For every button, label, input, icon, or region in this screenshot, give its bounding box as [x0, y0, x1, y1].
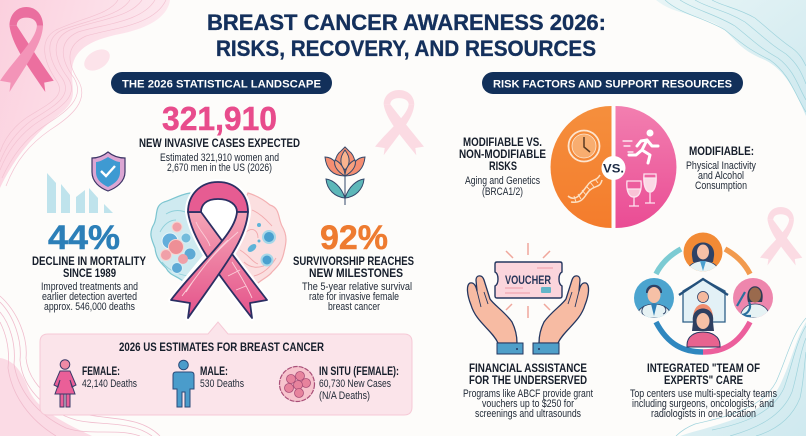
stat: mortality decline: Improved treatments and: [41, 281, 138, 293]
text: modifiable risks: and Alcohol: [698, 170, 744, 182]
icon: pink ribbon top left: [0, 7, 54, 92]
stat: survivorship: rate for invasive female: [309, 291, 399, 303]
stat: mortality decline: SINCE 1989: [63, 267, 116, 280]
icon: runner: [623, 130, 658, 163]
heading pill: statistical landscape: THE 2026 STATISTICAL LANDSCAPE: [122, 78, 321, 90]
ring segments: [656, 249, 750, 352]
text: modifiable risks: MODIFIABLE:: [689, 145, 754, 158]
icon: clock: [568, 130, 600, 162]
text: in situ: [319, 365, 399, 402]
right cell blob: [226, 193, 286, 290]
stat: mortality decline: [32, 219, 146, 313]
text: non-modifiable risks: RISKS: [489, 160, 517, 173]
burst rays: [506, 243, 550, 318]
house: [679, 279, 728, 322]
icon: female figure: [54, 360, 76, 407]
stat: new invasive cases: NEW INVASIVE CASES EXPECTED: [139, 137, 300, 150]
left cell blob: [151, 193, 216, 290]
title: RISKS, RECOVERY, AND RESOURCES: [216, 36, 596, 61]
icon: shield: [92, 152, 125, 191]
text: team of experts: Top centers use multi-specialty teams: [630, 388, 777, 400]
text: non-modifiable risks: Aging and Genetics: [465, 175, 540, 187]
central illustration: ribbon with cells: [151, 182, 286, 318]
doctor left: [634, 278, 674, 318]
stat: mortality decline: approx. 546,000 deaths: [44, 301, 135, 313]
decorative background: pink wave top left: [0, 0, 170, 188]
text: male deaths: [200, 365, 244, 390]
text: in situ: IN SITU (FEMALE):: [319, 365, 399, 378]
stat: survivorship: NEW MILESTONES: [309, 267, 403, 280]
text: in situ: (N/A Deaths): [319, 390, 370, 402]
text: modifiable risks: [686, 145, 757, 192]
text: financial assistance: screenings and ultrasounds: [475, 408, 581, 420]
patient: [687, 308, 720, 347]
heading pill: risk factors: RISK FACTORS AND SUPPORT RESOURCES: [493, 78, 732, 90]
text: financial assistance: [463, 362, 593, 420]
icon: flower: [325, 147, 365, 205]
text: non-modifiable risks: (BRCA1/2): [482, 186, 523, 198]
text: financial assistance: vouchers up to $250 for: [482, 398, 574, 410]
icon: male figure: [173, 360, 194, 407]
panel: 2026 US estimates: [40, 322, 412, 415]
icon: pale ribbon bottom right: [760, 207, 802, 265]
decorative background: teal wave bottom right: [676, 318, 806, 436]
stat: survivorship: The 5-year relative survival: [302, 281, 412, 293]
icon: in situ cell cluster: [280, 366, 314, 402]
left hand: [467, 276, 523, 354]
title: [207, 10, 606, 61]
icon: pale ribbon mid page: [375, 90, 424, 155]
heading pill: statistical landscape: [111, 72, 332, 94]
icon: team of experts ring: [634, 232, 773, 352]
stat: mortality decline: DECLINE IN MORTALITY: [32, 255, 146, 268]
text: non-modifiable risks: MODIFIABLE VS.: [463, 136, 542, 149]
text: modifiable risks: Physical Inactivity: [686, 160, 757, 172]
text: non-modifiable risks: [459, 136, 546, 198]
badge: VS: VS.: [603, 162, 624, 176]
text: male deaths: 530 Deaths: [200, 378, 244, 390]
stat: new invasive cases: Estimated 321,910 women and: [160, 152, 279, 164]
right hand: [533, 276, 589, 354]
icon: wine glasses: [627, 174, 656, 206]
text: financial assistance: FINANCIAL ASSISTANCE: [469, 362, 587, 375]
stat: survivorship: breast cancer: [328, 301, 380, 313]
ribbon: [171, 182, 267, 318]
doctor right with microscope: [733, 278, 773, 318]
text: financial assistance: FOR THE UNDERSERVED: [469, 374, 587, 387]
decorative background: blue wave top right: [656, 0, 806, 116]
text: male deaths: MALE:: [200, 365, 228, 378]
stat: survivorship: SURVIVORSHIP REACHES: [293, 255, 414, 268]
stat: new invasive cases: 321,910: [162, 100, 277, 137]
icon: declining bar chart: [47, 173, 113, 213]
stat: survivorship: 92%: [320, 219, 388, 257]
voucher ticket: VOUCHER: [505, 275, 552, 287]
text: female deaths: 42,140 Deaths: [82, 378, 137, 390]
stat: mortality decline: 44%: [48, 219, 120, 257]
text: team of experts: [630, 362, 777, 420]
decorative background: pink wave bottom left: [0, 296, 160, 436]
heading pill: risk factors: [482, 72, 743, 94]
stat: new invasive cases: [139, 100, 300, 174]
panel: 2026 US estimates: 2026 US ESTIMATES FOR BREAST CANCER: [119, 340, 324, 354]
stat: mortality decline: earlier detection averted: [42, 291, 137, 303]
doctor top: [683, 232, 723, 272]
text: team of experts: INTEGRATED "TEAM OF: [647, 362, 760, 375]
icon: voucher held by hands: [467, 243, 589, 354]
text: modifiable risks: Consumption: [695, 180, 747, 192]
text: female deaths: [82, 365, 137, 390]
comparison circle: risks: [551, 106, 676, 228]
text: in situ: 60,730 New Cases: [319, 378, 391, 390]
stat: new invasive cases: 2,670 men in the US (2026): [167, 162, 272, 174]
text: female deaths: FEMALE:: [82, 365, 120, 378]
text: team of experts: EXPERTS" CARE: [664, 374, 743, 387]
text: team of experts: radiologists in one location: [651, 408, 756, 420]
title: BREAST CANCER AWARENESS 2026:: [207, 10, 606, 35]
text: non-modifiable risks: NON-MODIFIABLE: [459, 148, 546, 161]
text: financial assistance: Programs like ABCF provide grant: [463, 388, 593, 400]
text: team of experts: including surgeons, oncologists, and: [632, 398, 774, 410]
stat: survivorship: [293, 219, 414, 313]
icon: DNA: [568, 175, 602, 202]
